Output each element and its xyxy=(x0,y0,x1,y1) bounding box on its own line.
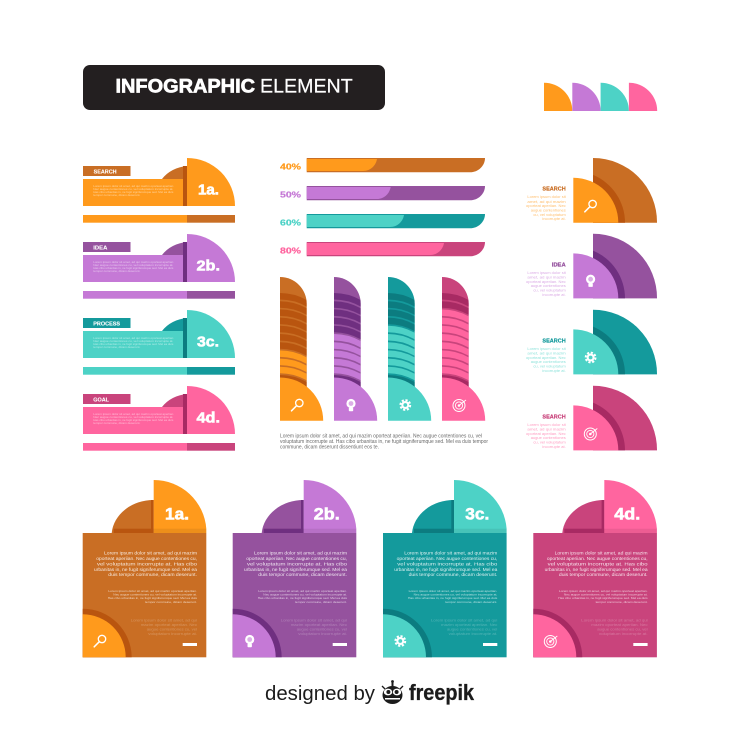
card 4d pink: duis tempor commune, dicam deserunt. xyxy=(559,572,648,577)
card 3c teal: urbanitas in, ne fugit signiferumque sed. Mel ea xyxy=(394,567,498,572)
card 1a orange: duis tempor commune, dicam deserunt. xyxy=(108,572,197,577)
panel: left step 3c process: tempor commune, dicam deserunt. xyxy=(93,345,140,349)
card 1a orange: Lorem ipsum dolor sit amet, ad qui xyxy=(131,618,197,622)
panel: left step 1a search xyxy=(83,158,235,223)
panel: left step 2b idea: IDEA xyxy=(93,246,107,252)
panel: left step 2b idea: Nec augue contentiones cu, vel voluptatum incorrupte at. xyxy=(93,263,173,267)
card 1a orange: mazim oporteat aperiian. Nec xyxy=(141,622,197,627)
card 3c teal: Has cibo urbanitas in, ne fugit signiferumque sed. Mel ea duis xyxy=(408,596,498,600)
panel: right fan search teal: cu, vel voluptatum xyxy=(533,364,566,369)
panel: left step 2b idea: tempor commune, dicam deserunt. xyxy=(93,269,140,273)
progress bar 80%: 80% xyxy=(280,246,301,256)
panel: left step 2b idea: Has cibo urbanitas in, ne fugit signiferumque sed. Mel ea duis xyxy=(93,266,174,270)
progress bar 60%: 60% xyxy=(280,218,301,228)
card 4d pink: augue contentiones cu, vel xyxy=(597,626,648,632)
panel: right fan idea purple: amet, ad qui mazim xyxy=(527,274,566,279)
panel: left step 3c process: 3c. xyxy=(197,334,219,351)
card 2b purple: urbanitas in, ne fugit signiferumque sed. Mel ea xyxy=(244,567,347,572)
panel: left step 1a search: Nec augue contentiones cu, vel voluptatum incorrupte at. xyxy=(93,187,173,191)
card 4d pink: voluptatum incorrupte at. xyxy=(599,631,648,636)
card 2b purple: tempor commune, dicam deserunt. xyxy=(295,600,347,604)
panel: left step 3c process xyxy=(83,310,235,375)
card 2b purple: Has cibo urbanitas in, ne fugit signiferumque sed. Mel ea duis xyxy=(258,596,347,600)
card 3c teal: vel voluptatum incorrupte at. Has cibo xyxy=(397,562,498,566)
card 4d pink: Nec augue contentiones cu, vel voluptatum incorrupte at. xyxy=(564,592,648,596)
panel: right fan search teal: incorrupte at. xyxy=(542,368,566,373)
column chart: teal process xyxy=(388,270,431,421)
card 2b purple: Lorem ipsum dolor sit amet, ad qui mazim oporteat aperiian. xyxy=(258,589,347,593)
panel: right fan search teal: Lorem ipsum dolor sit xyxy=(527,346,567,351)
panel: right fan search teal: oporteat aperiian. Nec xyxy=(526,355,566,360)
panel: right fan search teal: augue contentiones xyxy=(531,359,566,364)
panel: right fan search teal xyxy=(526,310,657,374)
panel: right fan idea purple xyxy=(526,234,657,298)
panel: left step 2b idea: Lorem ipsum dolor sit amet, ad qui mazim oporteat aperiian xyxy=(93,260,174,264)
card 4d pink: oporteat aperiian. Nec augue contentiones cu, xyxy=(547,556,648,561)
progress bar 60% xyxy=(280,214,485,228)
card 2b purple: voluptatum incorrupte at. xyxy=(298,631,347,636)
card 3c teal: 3c. xyxy=(465,505,489,524)
card 4d pink: mazim oporteat aperiian. Nec xyxy=(591,622,648,627)
card 3c teal: tempor commune, dicam deserunt. xyxy=(445,600,497,604)
icon: freepik mascot xyxy=(382,680,403,704)
card 2b purple: 2b. xyxy=(314,505,340,524)
title banner: ELEMENT xyxy=(260,76,353,98)
paragraph under column charts: voluptatum incorrupte at. Has cibo urbanitas in, ne fugit signiferumque sed. Mel ea duis tempor xyxy=(280,439,488,445)
card 4d pink: tempor commune, dicam deserunt. xyxy=(596,600,648,604)
card 2b purple: Nec augue contentiones cu, vel voluptatum incorrupte at. xyxy=(263,592,347,596)
panel: right fan idea purple: Lorem ipsum dolor sit xyxy=(527,270,567,275)
paragraph under column charts xyxy=(280,434,488,451)
panel: left step 2b idea xyxy=(83,234,235,299)
panel: left step 4d goal xyxy=(83,386,235,451)
card 2b purple: oporteat aperiian. Nec augue contentiones cu, xyxy=(246,556,347,561)
card 4d pink: Has cibo urbanitas in, ne fugit signiferumque sed. Mel ea duis xyxy=(558,596,648,600)
card 1a orange: Lorem ipsum dolor sit amet, ad qui mazim xyxy=(104,550,197,556)
card 3c teal: voluptatum incorrupte at. xyxy=(449,631,497,636)
card 1a orange: Has cibo urbanitas in, ne fugit signiferumque sed. Mel ea duis xyxy=(108,596,197,600)
progress bar 40%: 40% xyxy=(280,162,301,172)
panel: right fan search orange: Lorem ipsum dolor sit xyxy=(527,194,567,199)
progress bar 50%: 50% xyxy=(280,190,301,200)
card 3c teal: augue contentiones cu, vel xyxy=(447,626,497,632)
progress bar 40% xyxy=(280,158,485,172)
panel: right fan search orange: amet, ad qui mazim xyxy=(527,199,566,204)
panel: left step 4d goal: tempor commune, dicam deserunt. xyxy=(93,421,140,425)
column chart: purple idea xyxy=(334,270,377,421)
panel: left step 3c process: PROCESS xyxy=(93,322,120,328)
paragraph under column charts: commune, dicam deserunt dissentiunt eos te. xyxy=(280,445,379,451)
card 4d pink: 4d. xyxy=(614,505,640,524)
column chart: pink goal xyxy=(442,270,485,421)
panel: left step 1a search: Has cibo urbanitas in, ne fugit signiferumque sed. Mel ea duis xyxy=(93,190,174,194)
panel: right fan search orange: cu, vel voluptatum xyxy=(533,212,566,217)
card 3c teal: mazim oporteat aperiian. Nec xyxy=(441,622,497,627)
card 1a orange xyxy=(83,480,206,657)
panel: right fan search teal: amet, ad qui mazim xyxy=(527,351,566,356)
title banner: INFOGRAPHIC xyxy=(116,76,255,98)
card 3c teal: Lorem ipsum dolor sit amet, ad qui mazim xyxy=(404,550,497,556)
card 2b purple: mazim oporteat aperiian. Nec xyxy=(291,622,347,627)
panel: left step 1a search: 1a. xyxy=(198,182,219,199)
progress bar 50% xyxy=(280,186,485,200)
panel: right fan idea purple: incorrupte at. xyxy=(542,292,566,297)
panel: right fan search orange: incorrupte at. xyxy=(542,216,566,221)
panel: left step 3c process: Lorem ipsum dolor sit amet, ad qui mazim oporteat aperiian xyxy=(93,336,174,340)
panel: left step 4d goal: Has cibo urbanitas in, ne fugit signiferumque sed. Mel ea duis xyxy=(93,418,174,422)
panel: right fan search pink xyxy=(526,386,657,450)
card 2b purple: Lorem ipsum dolor sit amet, ad qui mazim xyxy=(254,550,347,556)
card 1a orange: voluptatum incorrupte at. xyxy=(148,631,197,636)
panel: left step 3c process: Has cibo urbanitas in, ne fugit signiferumque sed. Mel ea duis xyxy=(93,342,174,346)
card 3c teal: oporteat aperiian. Nec augue contentiones cu, xyxy=(397,556,497,561)
card 2b purple: vel voluptatum incorrupte at. Has cibo xyxy=(247,562,347,566)
panel: right fan search orange xyxy=(526,158,657,223)
card 1a orange: vel voluptatum incorrupte at. Has cibo xyxy=(97,562,197,566)
card 4d pink: vel voluptatum incorrupte at. Has cibo xyxy=(548,562,648,566)
card 4d pink xyxy=(533,480,657,657)
panel: right fan search orange: oporteat aperiian. Nec xyxy=(526,203,566,208)
panel: left step 2b idea: 2b. xyxy=(196,258,220,275)
card 1a orange: Nec augue contentiones cu, vel voluptatum incorrupte at. xyxy=(113,592,197,596)
column chart: orange search xyxy=(280,270,323,421)
card 1a orange: urbanitas in, ne fugit signiferumque sed. Mel ea xyxy=(94,567,197,572)
footer credit: designed by freepik: designed by xyxy=(265,683,375,705)
panel: left step 4d goal: Nec augue contentiones cu, vel voluptatum incorrupte at. xyxy=(93,415,173,419)
panel: left step 1a search: SEARCH xyxy=(94,170,117,176)
footer credit: designed by freepik xyxy=(265,680,475,705)
card 4d pink: Lorem ipsum dolor sit amet, ad qui mazim xyxy=(555,550,648,556)
card 2b purple: duis tempor commune, dicam deserunt. xyxy=(258,572,347,577)
panel: left step 1a search: Lorem ipsum dolor sit amet, ad qui mazim oporteat aperiian xyxy=(93,184,174,188)
card 3c teal xyxy=(383,480,507,657)
panel: right fan idea purple: augue contentiones xyxy=(531,283,566,288)
card 3c teal: Lorem ipsum dolor sit amet, ad qui xyxy=(431,618,497,622)
panel: left step 3c process: Nec augue contentiones cu, vel voluptatum incorrupte at. xyxy=(93,339,173,343)
card 3c teal: Nec augue contentiones cu, vel voluptatum incorrupte at. xyxy=(414,592,497,596)
panel: right fan search pink: Lorem ipsum dolor sit xyxy=(527,422,567,427)
panel: right fan search orange: augue contentiones xyxy=(531,208,566,212)
card 1a orange: augue contentiones cu, vel xyxy=(147,626,197,632)
panel: right fan search pink: cu, vel voluptatum xyxy=(533,440,566,445)
panel: right fan search pink: incorrupte at. xyxy=(542,444,566,449)
colour swatches: four quarter circles xyxy=(544,83,657,111)
card 2b purple: augue contentiones cu, vel xyxy=(297,626,347,632)
paragraph under column charts: Lorem ipsum dolor sit amet, ad qui mazim oporteat aperiian. Nec augue contentiones cu, vel xyxy=(280,434,482,440)
panel: right fan search teal: SEARCH xyxy=(542,338,566,344)
panel: right fan idea purple: oporteat aperiian. Nec xyxy=(526,279,566,284)
card 2b purple xyxy=(233,480,356,657)
card 4d pink: Lorem ipsum dolor sit amet, ad qui mazim oporteat aperiian. xyxy=(559,589,648,593)
panel: right fan search pink: oporteat aperiian. Nec xyxy=(526,431,566,436)
card 2b purple: Lorem ipsum dolor sit amet, ad qui xyxy=(281,618,347,622)
panel: right fan idea purple: cu, vel voluptatum xyxy=(533,287,566,292)
card 4d pink: Lorem ipsum dolor sit amet, ad qui xyxy=(581,618,648,622)
panel: left step 4d goal: Lorem ipsum dolor sit amet, ad qui mazim oporteat aperiian xyxy=(93,412,174,416)
panel: right fan idea purple: IDEA xyxy=(552,262,566,268)
panel: right fan search pink: amet, ad qui mazim xyxy=(527,427,566,432)
progress bar 80% xyxy=(280,242,485,256)
panel: left step 1a search: tempor commune, dicam deserunt. xyxy=(93,193,140,197)
card 4d pink: urbanitas in, ne fugit signiferumque sed. Mel ea xyxy=(545,567,648,572)
panel: left step 4d goal: 4d. xyxy=(196,410,220,427)
title banner xyxy=(83,65,385,110)
card 3c teal: duis tempor commune, dicam deserunt. xyxy=(409,572,497,577)
card 3c teal: Lorem ipsum dolor sit amet, ad qui mazim oporteat aperiian. xyxy=(409,589,497,593)
footer credit: designed by freepik: freepik xyxy=(409,680,475,705)
panel: right fan search pink: SEARCH xyxy=(542,414,566,420)
card 1a orange: 1a. xyxy=(165,505,189,524)
card 1a orange: tempor commune, dicam deserunt. xyxy=(145,600,197,604)
panel: left step 4d goal: GOAL xyxy=(93,398,110,404)
panel: right fan search pink: augue contentiones xyxy=(531,435,566,440)
card 1a orange: Lorem ipsum dolor sit amet, ad qui mazim oporteat aperiian. xyxy=(108,589,197,593)
panel: right fan search orange: SEARCH xyxy=(542,187,566,193)
card 1a orange: oporteat aperiian. Nec augue contentiones cu, xyxy=(96,556,197,561)
